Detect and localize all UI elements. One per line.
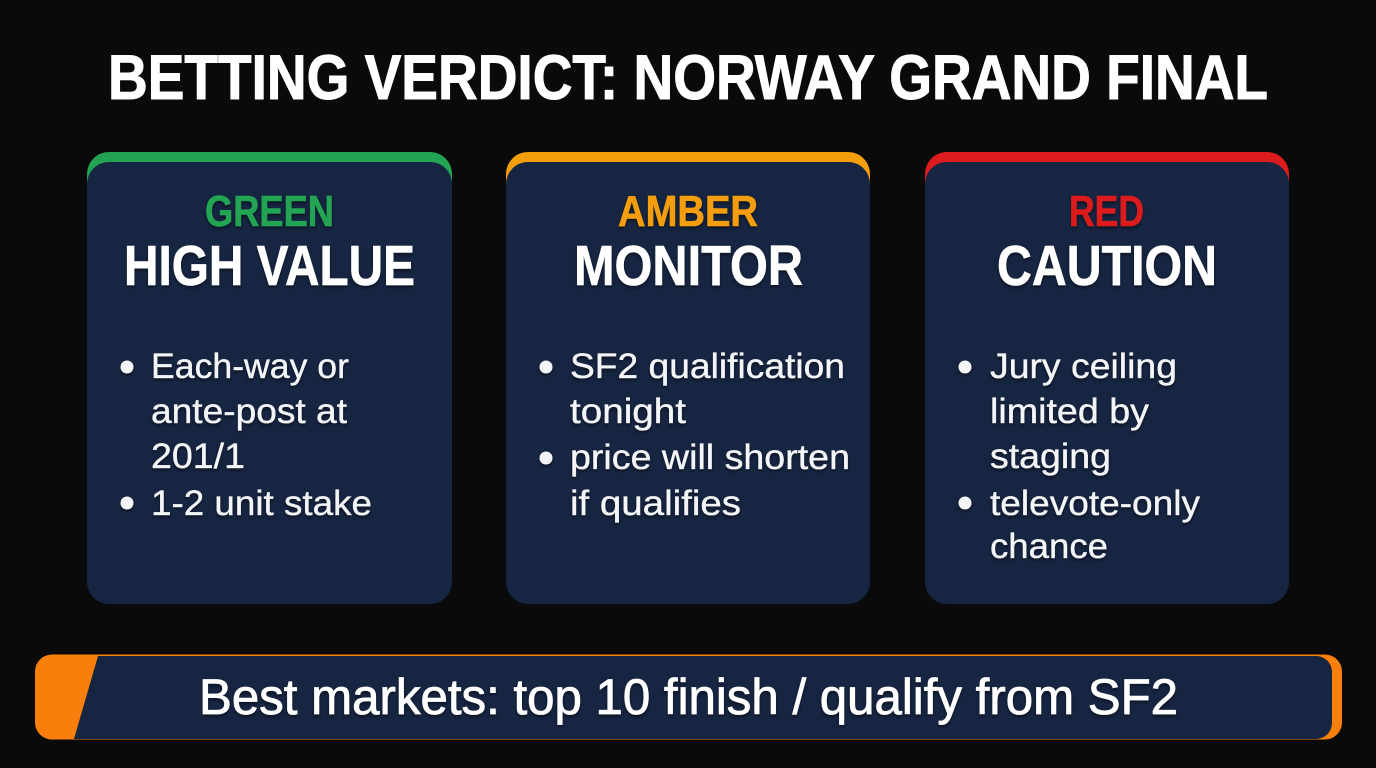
card body [506, 162, 870, 604]
bullet list: SF2 qualification [570, 347, 845, 386]
red top band [925, 152, 1289, 212]
bullet list: tonight [570, 392, 686, 431]
heading: caution: CAUTION [997, 234, 1217, 298]
bullet list: televote-only [990, 484, 1201, 523]
heading: green: GREEN [205, 187, 334, 236]
card body [925, 162, 1289, 604]
bullet list [120, 347, 372, 523]
bullet list: ante-post at [151, 392, 347, 431]
navy banner body [74, 656, 1332, 739]
green top band [87, 152, 452, 212]
bullet list: if qualifies [570, 484, 741, 523]
card body [87, 162, 452, 604]
heading: amber: AMBER [618, 187, 758, 236]
bullet list: staging [990, 437, 1111, 476]
bullet list: Each-way or [151, 347, 349, 386]
bullet list: Jury ceiling [990, 347, 1177, 386]
orange banner backing [35, 654, 1342, 740]
heading: monitor: MONITOR [574, 234, 803, 298]
panel: amber monitor [506, 152, 870, 604]
heading: high value: HIGH VALUE [124, 234, 415, 298]
bullet list: 1-2 unit stake [151, 484, 372, 523]
bullet list [958, 347, 1201, 566]
bullet list: 201/1 [151, 437, 245, 476]
bullet list: price will shorten [570, 438, 850, 477]
bullet list [540, 347, 850, 523]
bullet list: limited by [990, 392, 1150, 431]
panel: red caution [925, 152, 1289, 604]
panel: green high value [87, 152, 452, 604]
banner text: Best markets: top 10 finish / qualify from SF2 [199, 669, 1178, 725]
bullet list: chance [990, 527, 1108, 566]
heading: red: RED [1069, 187, 1144, 236]
banner: best markets [35, 654, 1342, 740]
amber top band [506, 152, 870, 212]
